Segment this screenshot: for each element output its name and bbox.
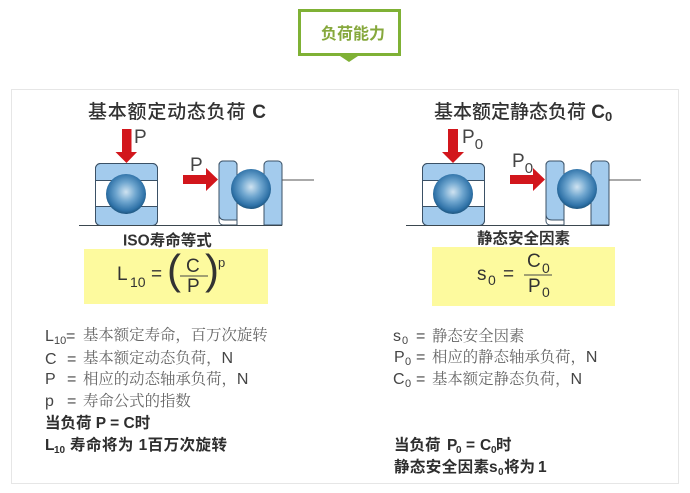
formula: s0 equation: 0	[542, 260, 550, 276]
note: static safety factor is 1: 将为	[504, 458, 535, 476]
formula: s0 equation: P	[528, 276, 541, 297]
legend: dynamic symbols	[45, 326, 268, 410]
formula: s0 equation: 0	[542, 284, 550, 300]
note: L10 life is one million revolutions: 10	[54, 445, 66, 456]
note: static safety factor is 1	[394, 457, 547, 478]
panel: basic static load rating	[393, 101, 641, 478]
shaft line	[406, 224, 609, 226]
legend: static symbols: 基本额定静态负荷，N	[432, 369, 582, 388]
diagram: radial bearing with load P: P	[134, 127, 147, 148]
note: L10 life is one million revolutions	[45, 435, 227, 456]
main panel	[12, 90, 678, 484]
legend: static symbols: =	[416, 349, 425, 366]
legend: static symbols: 0	[405, 378, 411, 390]
legend: dynamic symbols: P	[45, 371, 56, 388]
note: L10 life is one million revolutions: 寿命将为 1百万次旋转	[70, 435, 227, 454]
legend: dynamic symbols: p	[45, 393, 54, 410]
note: when P equals C: 当负荷 P = C时	[45, 414, 151, 432]
note: when P0 equals C0	[394, 436, 512, 456]
formula: L10 equation: P	[187, 276, 200, 297]
diagram: radial bearing with load P0: 0	[475, 136, 483, 153]
formula: s0 equation: C	[527, 251, 541, 272]
note: static safety factor is 1: s	[489, 459, 498, 476]
legend: dynamic symbols: =	[67, 371, 76, 388]
legend: static symbols: 0	[402, 335, 408, 347]
note: L10 life is one million revolutions: L	[45, 437, 54, 454]
formula: L10 equation: (	[167, 246, 181, 293]
title: static load rating C0: 0	[605, 109, 612, 124]
shaft line	[79, 224, 282, 226]
legend: dynamic symbols: 基本额定寿命，百万次旋转	[83, 326, 268, 344]
note: static safety factor is 1: 1	[538, 459, 547, 476]
legend: static symbols: =	[416, 328, 425, 345]
note: static safety factor is 1: 静态安全因素	[394, 457, 489, 476]
note: when P0 equals C0: C	[480, 437, 491, 454]
legend: static symbols	[393, 327, 597, 390]
formula: L10 equation: 10	[130, 274, 146, 290]
note: when P0 equals C0: 当负荷	[394, 436, 441, 454]
note: when P0 equals C0: 时	[496, 436, 512, 454]
legend: dynamic symbols: C	[45, 351, 57, 368]
note: when P0 equals C0: P	[447, 437, 457, 454]
legend: dynamic symbols: 寿命公式的指数	[83, 392, 191, 410]
legend: dynamic symbols: L	[45, 328, 54, 345]
diagram: axial bearing with load P	[183, 155, 314, 225]
legend: static symbols: C	[393, 371, 405, 388]
diagram: radial bearing with load P0	[422, 127, 484, 226]
diagram: radial bearing with load P0: P	[462, 127, 475, 148]
label: static safety factor: 静态安全因素	[477, 228, 570, 248]
heading: load capacity	[300, 10, 400, 62]
legend: static symbols: 0	[405, 356, 411, 368]
diagram: radial bearing with load P	[96, 127, 158, 226]
formula: L10 equation: )	[205, 246, 219, 293]
note: when P0 equals C0: 0	[491, 445, 497, 456]
formula: s0 equation: =	[503, 264, 514, 285]
legend: dynamic symbols: =	[67, 351, 76, 368]
legend: dynamic symbols: =	[66, 328, 75, 345]
formula: L10 equation: =	[151, 264, 162, 285]
legend: static symbols: =	[416, 371, 425, 388]
diagram: axial bearing with load P0: 0	[525, 160, 533, 177]
formula: s0 equation	[432, 247, 615, 306]
formula: L10 equation: L	[117, 264, 128, 285]
legend: dynamic symbols: 10	[54, 335, 66, 347]
panel: basic dynamic load rating	[45, 101, 314, 456]
title: dynamic load rating C: 基本额定动态负荷 C	[88, 101, 266, 123]
heading: load capacity: 负荷能力	[321, 24, 385, 43]
legend: static symbols: 静态安全因素	[432, 327, 524, 345]
formula: s0 equation: 0	[488, 272, 496, 288]
label: ISO life equation: ISO寿命等式	[123, 230, 212, 250]
diagram: axial bearing with load P: P	[190, 155, 203, 176]
diagram: axial bearing with load P0: P	[512, 151, 525, 172]
title: static load rating C0: 基本额定静态负荷 C	[434, 102, 605, 123]
formula: L10 equation: C	[186, 256, 200, 277]
formula: L10 equation: p	[218, 255, 225, 270]
formula: s0 equation: s	[477, 264, 486, 285]
formula: L10 equation	[84, 246, 268, 304]
legend: dynamic symbols: 基本额定动态负荷，N	[83, 348, 233, 367]
legend: static symbols: P	[394, 349, 405, 366]
note: static safety factor is 1: 0	[498, 467, 504, 478]
legend: dynamic symbols: =	[67, 393, 76, 410]
legend: static symbols: 相应的静态轴承负荷，N	[432, 347, 597, 366]
note: when P0 equals C0: 0	[456, 445, 462, 456]
note: when P0 equals C0: =	[466, 437, 475, 454]
legend: static symbols: s	[393, 328, 401, 345]
diagram: axial bearing with load P0	[510, 151, 641, 225]
legend: dynamic symbols: 相应的动态轴承负荷，N	[83, 369, 248, 388]
